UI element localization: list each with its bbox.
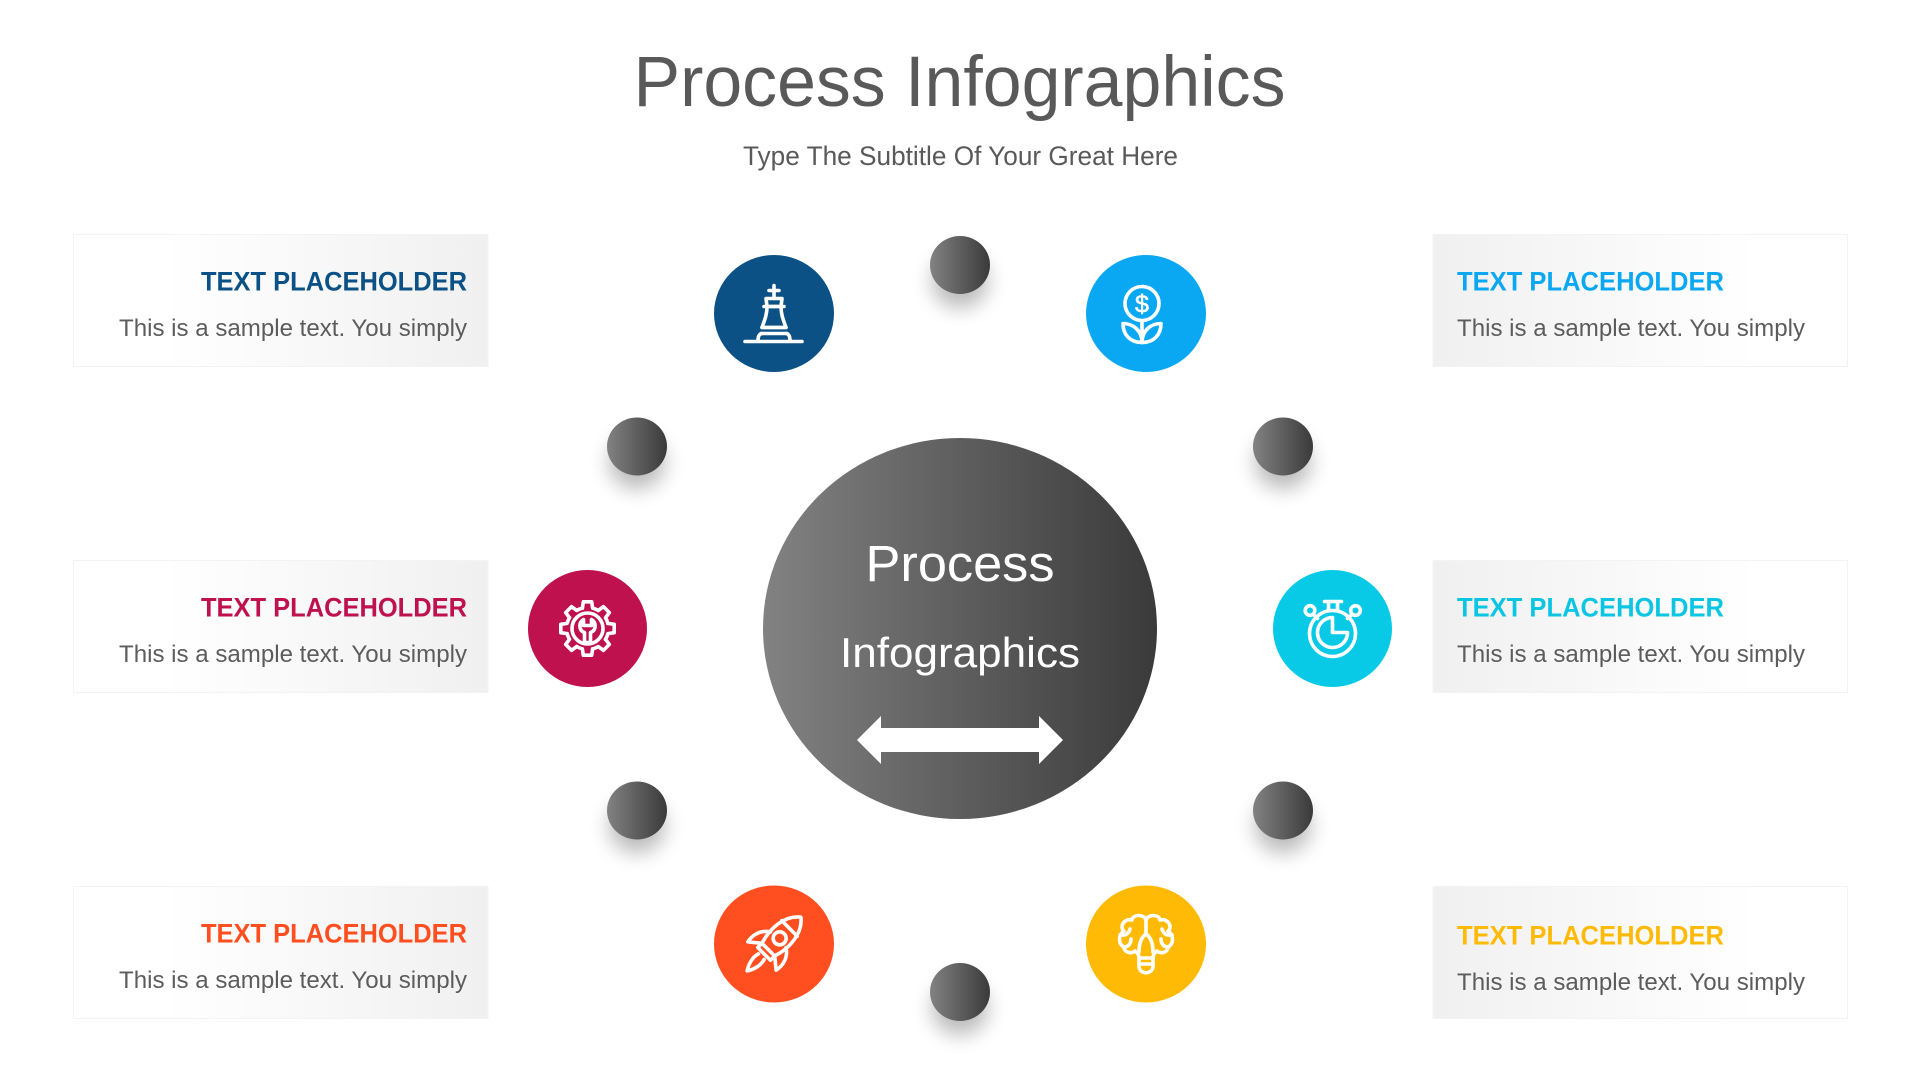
icon: double arrow — [857, 716, 1063, 764]
center label: Process: Process — [866, 535, 1054, 592]
dot: upper right — [1253, 418, 1313, 489]
dot: lower right — [1253, 782, 1313, 853]
body text: top left: This is a sample text. You simply — [119, 315, 468, 342]
panel: bottom right text — [1433, 886, 1848, 1018]
panel: middle right text — [1433, 560, 1848, 692]
icon: gear with wrench on crimson circle — [528, 570, 647, 687]
dot: bottom — [930, 963, 990, 1035]
panel: bottom left text — [74, 886, 488, 1018]
heading: middle left: TEXT PLACEHOLDER — [201, 592, 467, 622]
body text: middle left: This is a sample text. You simply — [119, 641, 468, 668]
subtitle: Type The Subtitle Of Your Great Here — [743, 141, 1178, 171]
body text: bottom right: This is a sample text. You simply — [1457, 969, 1806, 996]
center label: Infographics: Infographics — [840, 629, 1080, 676]
panel: top left text — [74, 234, 488, 366]
icon: stopwatch on cyan circle — [1273, 570, 1392, 687]
heading: bottom right: TEXT PLACEHOLDER — [1457, 920, 1724, 950]
title: Process Infographics — [634, 43, 1286, 122]
dot: lower left — [607, 782, 667, 853]
panel: middle left text — [74, 560, 488, 692]
icon: money flower on sky circle — [1086, 255, 1206, 372]
dot: top — [930, 236, 990, 308]
center circle — [763, 438, 1157, 819]
heading: bottom left: TEXT PLACEHOLDER — [201, 918, 467, 948]
icon: brain bulb on amber circle — [1086, 886, 1206, 1002]
icon: money flower on sky circle: $ — [1135, 290, 1149, 318]
body text: middle right: This is a sample text. You simply — [1457, 641, 1806, 668]
icon: rocket on orange circle — [714, 886, 834, 1002]
heading: middle right: TEXT PLACEHOLDER — [1457, 592, 1724, 622]
heading: top right: TEXT PLACEHOLDER — [1457, 266, 1724, 296]
body text: top right: This is a sample text. You simply — [1457, 315, 1806, 342]
dot: upper left — [607, 418, 667, 489]
panel: top right text — [1433, 234, 1848, 366]
heading: top left: TEXT PLACEHOLDER — [201, 266, 467, 296]
icon: chess king on navy circle — [714, 255, 834, 372]
body text: bottom left: This is a sample text. You simply — [119, 967, 468, 994]
